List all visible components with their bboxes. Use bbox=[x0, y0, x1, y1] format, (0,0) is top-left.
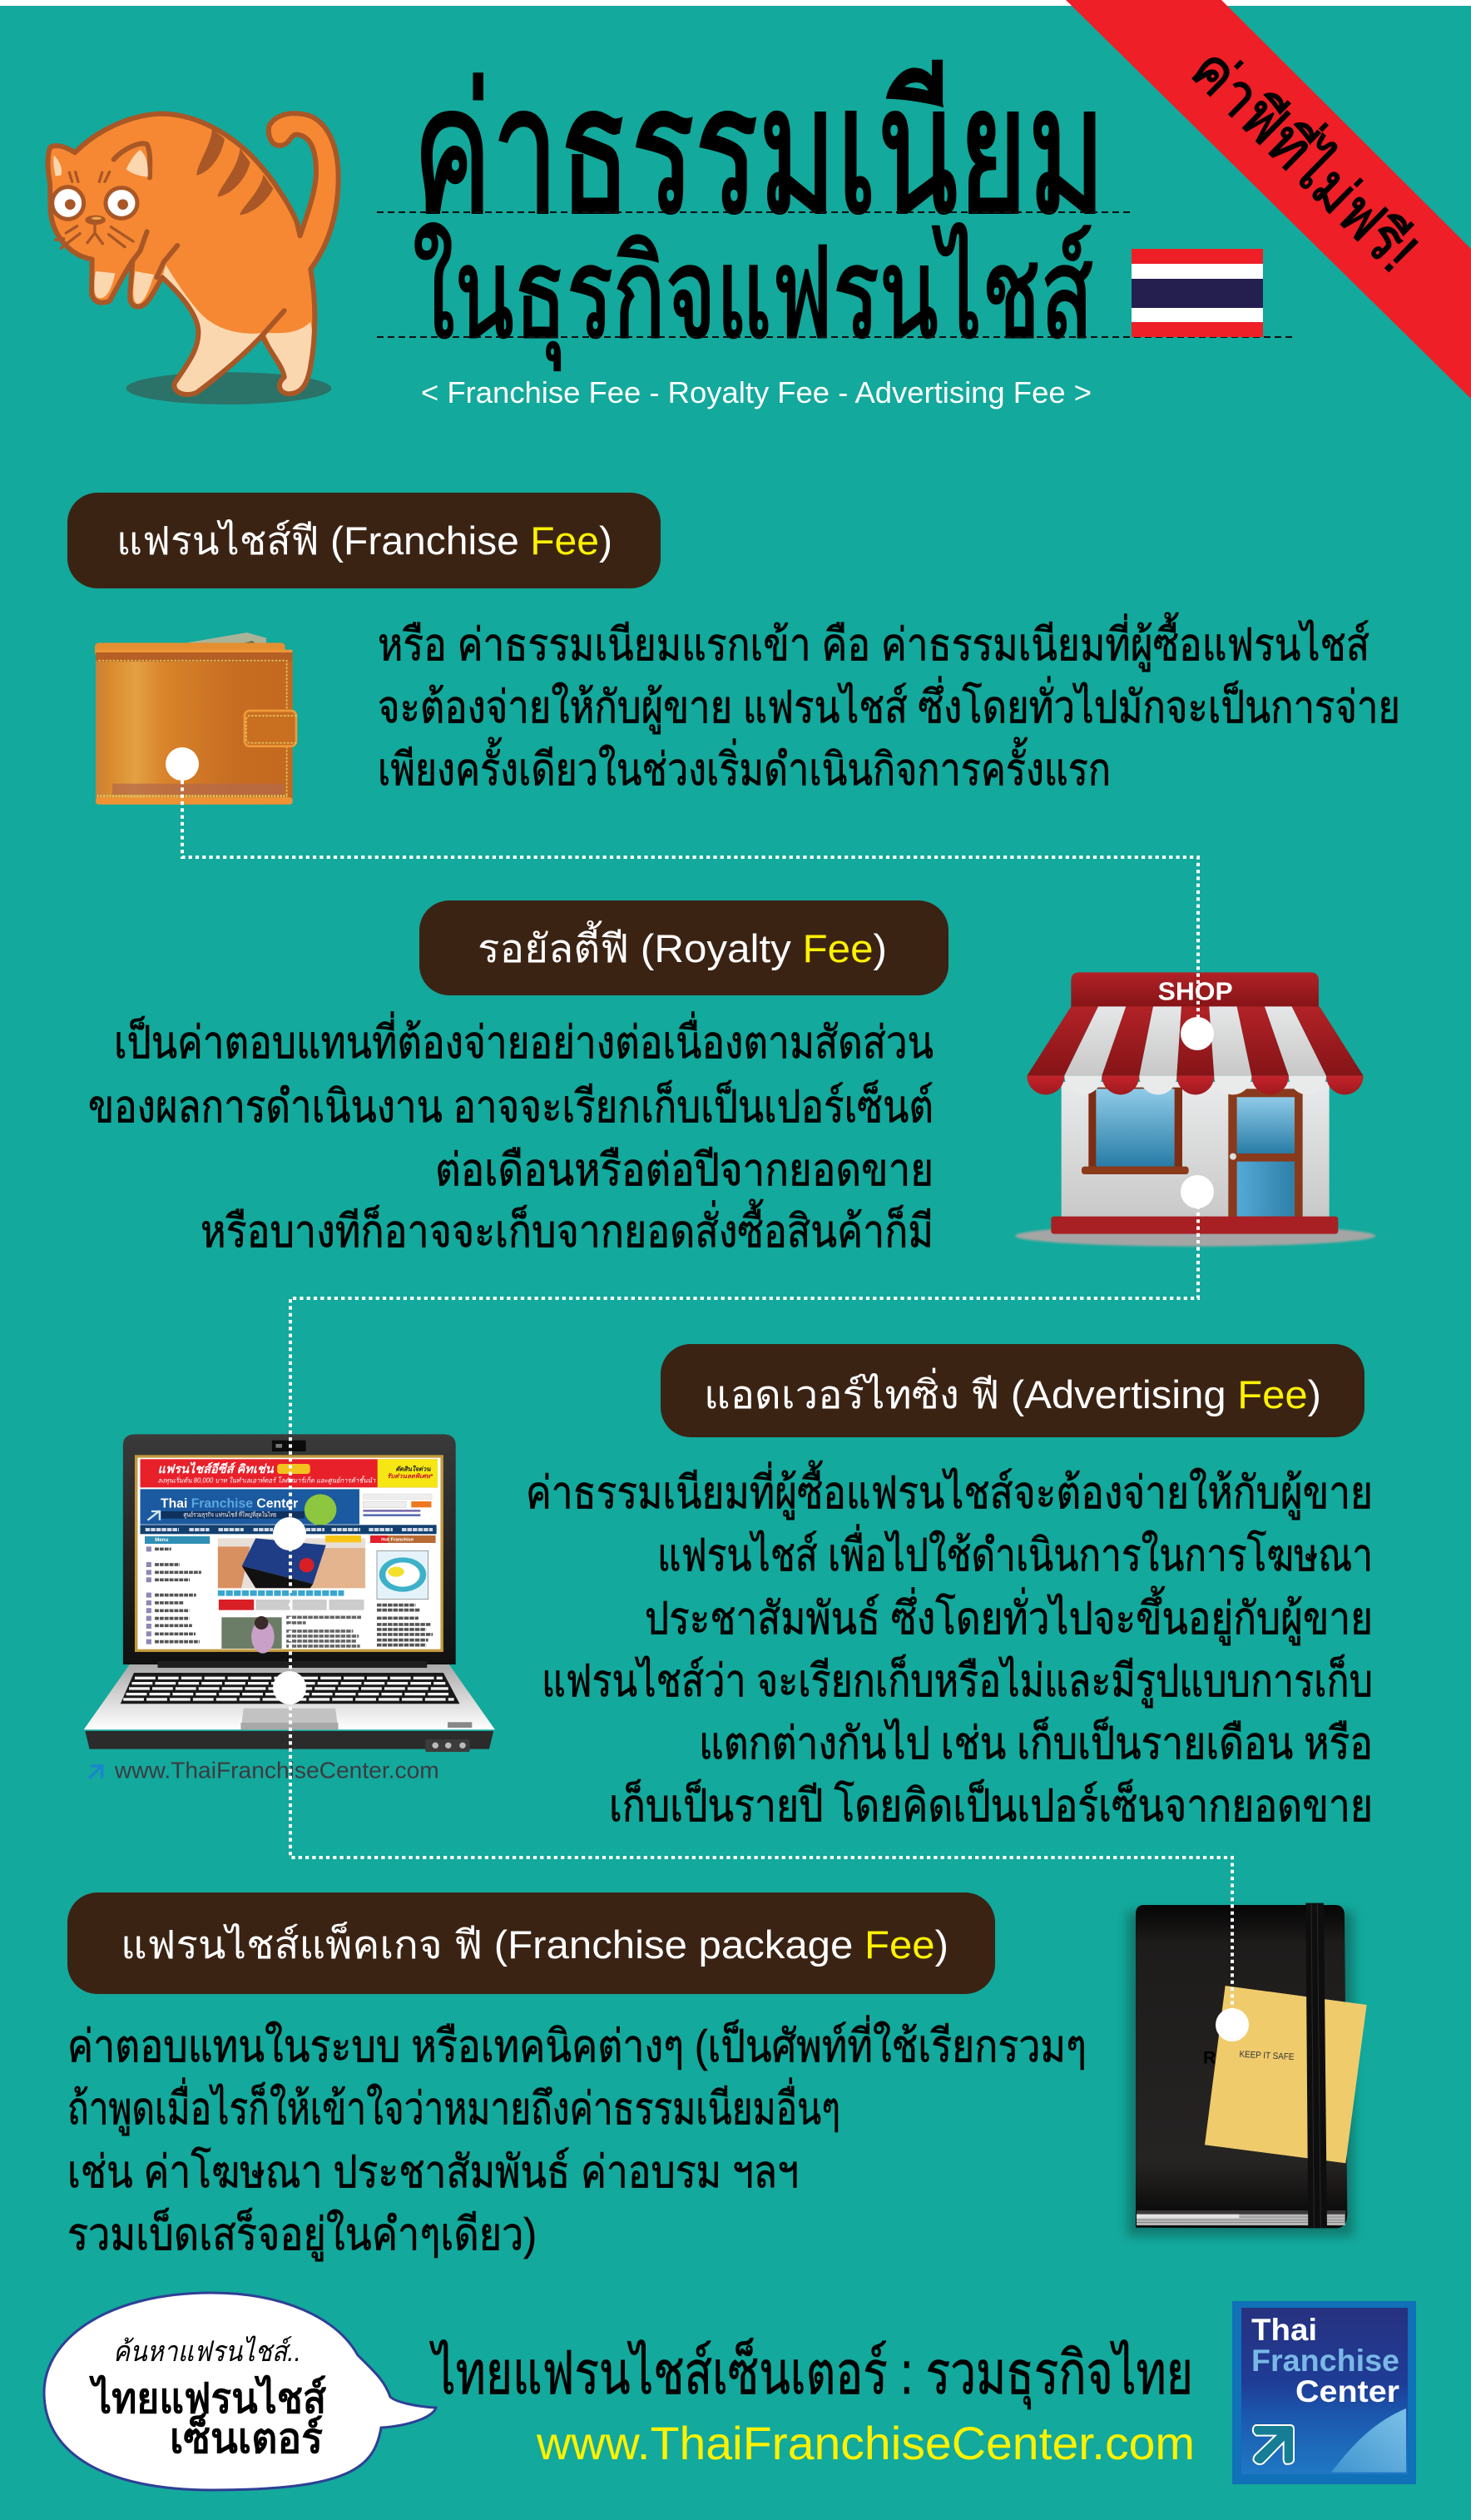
description text: ค่าตอบแทนในระบบ หรือเทคนิคต่างๆ (เป็นศัพท์ที่ใช้เรียกรวมๆ bbox=[67, 2015, 1087, 2071]
panel: franchise fee bbox=[67, 493, 1400, 805]
website banner: รับส่วนลดพิเศษ* bbox=[387, 1472, 433, 1480]
description text: ของผลการดำเนินงาน อาจจะเรียกเก็บเป็นเปอร์เซ็นต์ bbox=[88, 1080, 934, 1132]
website hot franchise bbox=[370, 1535, 436, 1645]
description text bbox=[88, 1011, 934, 1257]
footer speech bubble: เซ็นเตอร์ bbox=[170, 2413, 323, 2462]
description text: เป็นค่าตอบแทนที่ต้องจ่ายอย่างต่อเนื่องตามสัดส่วน bbox=[114, 1011, 934, 1068]
heading pill bbox=[67, 493, 661, 588]
footer speech bubble bbox=[44, 2293, 436, 2490]
heading pill: แฟรนไชส์แพ็คเกจ ฟี (Franchise package Fee) bbox=[121, 1921, 948, 1967]
description text: เช่น ค่าโฆษณา ประชาสัมพันธ์ ค่าอบรม ฯลฯ bbox=[67, 2146, 799, 2197]
website nav bbox=[141, 1525, 437, 1534]
panel: royalty fee bbox=[88, 900, 1375, 1257]
logo: Thai Franchise Center bbox=[1232, 2301, 1416, 2484]
connector dots bbox=[166, 747, 1249, 2041]
title: ในธุรกิจแฟรนไชส์ bbox=[413, 223, 1093, 370]
website header: Thai Franchise Center bbox=[161, 1497, 298, 1511]
website sidebar: Menu bbox=[155, 1537, 169, 1543]
heading pill: แฟรนไชส์ฟี (Franchise Fee) bbox=[116, 518, 612, 563]
icon: Thai flag bbox=[1132, 249, 1263, 337]
description text: รวมเบ็ดเสร็จอยู่ในคำๆเดียว) bbox=[67, 2208, 537, 2261]
footer tagline: ไทยแฟรนไชส์เซ็นเตอร์ : รวมธุรกิจไทย bbox=[429, 2338, 1193, 2409]
footer website url: www.ThaiFranchiseCenter.com bbox=[536, 2417, 1195, 2469]
title: ค่าธรรมเนียม bbox=[413, 52, 1106, 251]
corner ribbon: fee is not free bbox=[1066, 0, 1471, 399]
logo: Thai Franchise Center: Thai bbox=[1251, 2313, 1317, 2347]
description text: เพียงครั้งเดียวในช่วงเริ่มดำเนินกิจการครั้งแรก bbox=[378, 737, 1111, 795]
heading pill bbox=[67, 1892, 995, 1994]
description text bbox=[67, 2015, 1087, 2261]
website sidebar bbox=[145, 1536, 210, 1642]
website banner: ตัดสินใจด่วน bbox=[395, 1465, 431, 1472]
website banner: ลงทุนเริ่มต้น 80,000 บาท ในทำเลเอาท์ดอร์ โลตัสมาร์เก็ต และศูนย์การค้าชั้นนำ bbox=[158, 1476, 376, 1486]
title bbox=[377, 52, 1295, 370]
corner ribbon: fee is not free: ค่าฟีที่ไม่ฟรี! bbox=[1178, 30, 1435, 285]
footer speech bubble: ค้นหาแฟรนไชส์.. bbox=[113, 2335, 301, 2368]
icon: wallet bbox=[95, 632, 297, 805]
website banner bbox=[141, 1459, 438, 1487]
icon: notebook: R bbox=[1203, 2047, 1216, 2067]
icon: shop: SHOP bbox=[1158, 978, 1233, 1006]
website header bbox=[141, 1489, 359, 1525]
website address: www.ThaiFranchiseCenter.com bbox=[114, 1758, 439, 1784]
logo: Thai Franchise Center: Center bbox=[1295, 2374, 1399, 2408]
description text bbox=[526, 1461, 1373, 1831]
website banner: แฟรนไชส์อีซีส์ คิทเช่น bbox=[158, 1461, 274, 1476]
icon: shop bbox=[1015, 972, 1375, 1247]
website hot franchise: Hot Franchise bbox=[381, 1537, 414, 1542]
footer speech bubble: ไทยแฟรนไชส์ bbox=[88, 2374, 326, 2422]
description text: หรือบางทีก็อาจจะเก็บจากยอดสั่งซื้อสินค้าก็มี bbox=[201, 1199, 934, 1257]
panel: franchise package fee bbox=[67, 1892, 1367, 2261]
description text bbox=[378, 613, 1400, 795]
icon: notebook: KEEP IT SAFE bbox=[1239, 2050, 1295, 2062]
heading pill bbox=[661, 1344, 1365, 1437]
dotted connector line bbox=[182, 781, 1232, 2025]
panel: advertising fee bbox=[84, 1344, 1373, 1831]
description text: ต่อเดือนหรือต่อปีจากยอดขาย bbox=[435, 1145, 934, 1195]
icon: orange cat bbox=[48, 113, 339, 404]
website header: ศูนย์รวมธุรกิจ แฟรนไชส์ ที่ใหญ่ที่สุดในไทย bbox=[184, 1510, 276, 1518]
icon: notebook bbox=[1127, 1903, 1367, 2236]
heading pill: แอดเวอร์ไทซิ่ง ฟี (Advertising Fee) bbox=[704, 1367, 1321, 1416]
description text: ถ้าพูดเมื่อไรก็ให้เข้าใจว่าหมายถึงค่าธรรมเนียมอื่นๆ bbox=[67, 2077, 840, 2136]
subtitle: < Franchise Fee - Royalty Fee - Advertising Fee > bbox=[421, 375, 1092, 409]
icon: laptop bbox=[84, 1434, 495, 1784]
website hero bbox=[218, 1535, 365, 1588]
heading pill: รอยัลตี้ฟี (Royalty Fee) bbox=[478, 920, 887, 970]
logo: Thai Franchise Center: Franchise bbox=[1251, 2344, 1399, 2378]
heading pill bbox=[419, 900, 948, 995]
description text: แตกต่างกันไป เช่น เก็บเป็นรายเดือน หรือ bbox=[699, 1717, 1373, 1768]
